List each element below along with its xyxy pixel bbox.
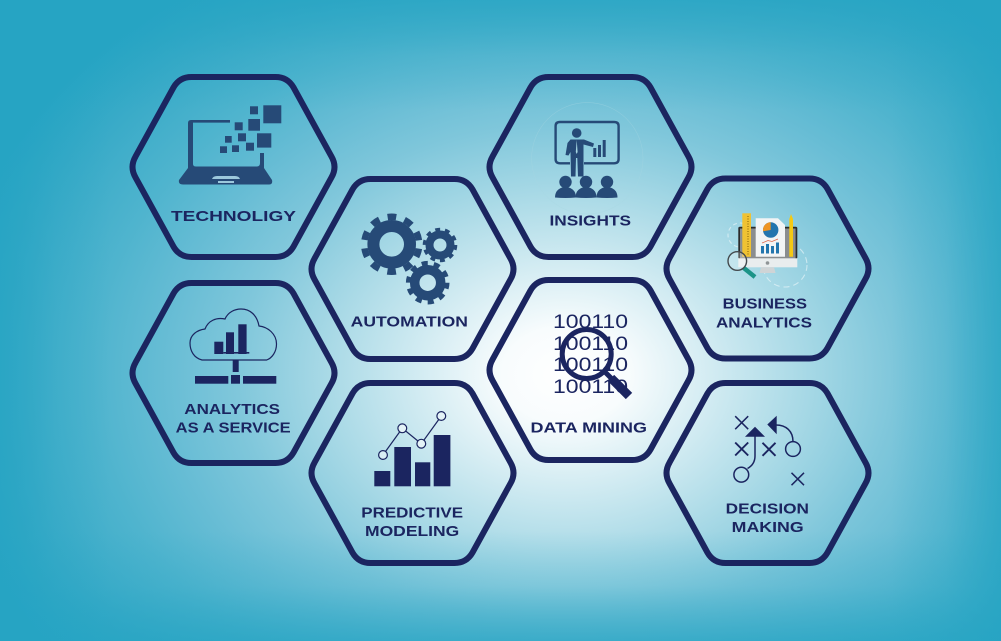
icon: binary and magnifier: 100110 xyxy=(553,334,628,355)
label: decision making: MAKING xyxy=(732,519,804,536)
label: analytics as a service xyxy=(176,401,291,437)
panel: technology xyxy=(132,77,334,257)
label: technology: TECHNOLIGY xyxy=(171,208,296,225)
panel: decision making xyxy=(666,383,868,563)
icon: laptop xyxy=(179,105,281,184)
label: data mining: DATA MINING xyxy=(530,420,647,437)
label: business analytics: BUSINESS xyxy=(723,296,807,312)
icon: binary and magnifier xyxy=(553,312,629,398)
icon: cloud xyxy=(190,309,276,384)
icon: binary and magnifier: 100110 xyxy=(553,355,628,376)
icon: bar and line chart xyxy=(374,412,450,486)
icon: gears xyxy=(364,217,456,302)
label: analytics as a service: AS A SERVICE xyxy=(176,420,291,437)
label: business analytics: ANALYTICS xyxy=(716,314,812,332)
panel: business analytics xyxy=(666,178,868,358)
label: predictive modeling: PREDICTIVE xyxy=(361,505,463,522)
panel: data mining xyxy=(490,280,692,460)
label: decision making: DECISION xyxy=(726,501,809,518)
label: decision making xyxy=(726,501,809,536)
label: automation: AUTOMATION xyxy=(351,314,468,331)
panel: automation xyxy=(312,179,514,359)
icon: binary and magnifier: 100110 xyxy=(553,312,628,333)
panel: predictive modeling xyxy=(312,383,514,563)
panel: insights xyxy=(490,77,692,257)
label: predictive modeling: MODELING xyxy=(365,523,459,540)
label: business analytics xyxy=(716,296,812,332)
icon: binary and magnifier: 100110 xyxy=(553,377,628,398)
label: insights: INSIGHTS xyxy=(550,213,631,230)
icon: business dashboard xyxy=(728,213,807,287)
label: analytics as a service: ANALYTICS xyxy=(184,401,280,418)
label: predictive modeling xyxy=(361,505,463,540)
icon: presenter and audience xyxy=(532,103,643,214)
icon: strategy play diagram xyxy=(734,416,804,485)
panel: analytics as a service xyxy=(132,283,334,463)
